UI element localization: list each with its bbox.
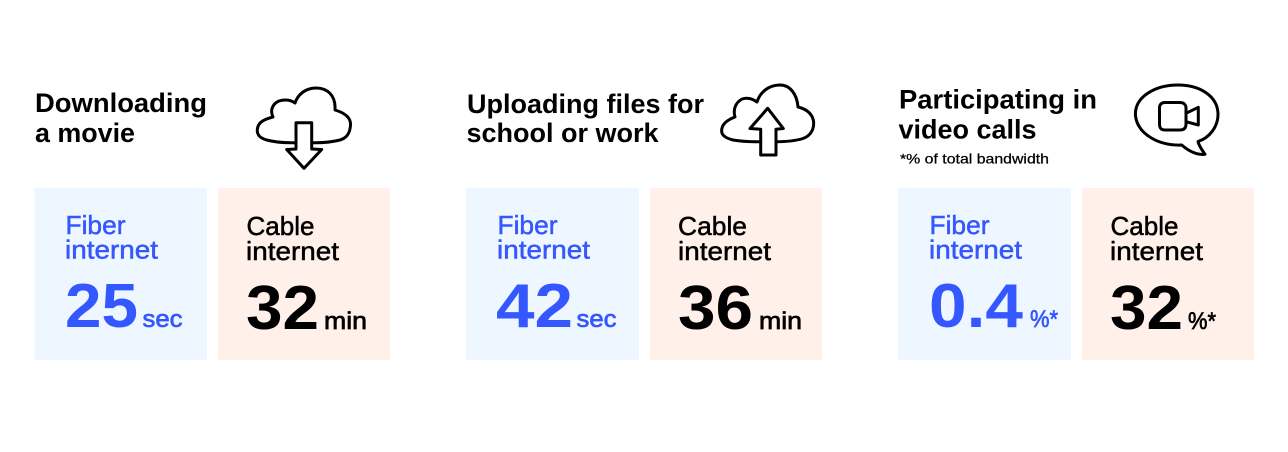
heading: participating in video calls: Participating in [899, 84, 1097, 114]
section: downloading a movie [34, 88, 390, 360]
panel: fiber upload: internet [497, 234, 591, 264]
panel: cable upload: 36 [678, 274, 753, 343]
heading: downloading a movie: a movie [35, 118, 135, 148]
panel: cable video calls: Cable [1110, 211, 1178, 241]
panel: cable video calls: internet [1110, 236, 1204, 266]
heading: participating in video calls: video calls [898, 114, 1036, 144]
panel: cable upload: internet [678, 236, 772, 266]
panel: cable video calls [1082, 188, 1254, 360]
panel: fiber download: 25 [65, 272, 138, 341]
panel: fiber download [34, 188, 207, 360]
panel: fiber video calls: internet [929, 234, 1023, 264]
icon: speech bubble with video camera [1135, 85, 1218, 154]
panel: fiber upload: 42 [496, 272, 573, 341]
panel: cable video calls: %* [1188, 308, 1216, 335]
panel: cable video calls: 32 [1110, 274, 1183, 343]
panel: cable upload: Cable [678, 211, 747, 241]
panel: fiber video calls: Fiber [930, 210, 990, 240]
panel: cable upload [650, 188, 822, 360]
panel: fiber download: Fiber [66, 210, 126, 240]
panel: fiber upload: sec [576, 306, 616, 333]
panel: fiber video calls [898, 188, 1071, 360]
heading: downloading a movie: Downloading [35, 88, 207, 118]
heading: uploading files for school or work: Uploading files for [467, 89, 704, 119]
panel: cable download: internet [246, 236, 340, 266]
panel: fiber upload [466, 188, 639, 360]
section: video calls [898, 84, 1254, 360]
panel: fiber download: sec [142, 306, 182, 333]
footnote: percent of total bandwidth: *% of total bandwidth [900, 150, 1049, 166]
panel: fiber download: internet [65, 234, 159, 264]
panel: cable download: Cable [246, 211, 314, 241]
section: uploading files [466, 85, 822, 360]
heading: downloading a movie [35, 88, 207, 148]
panel: cable download: 32 [246, 274, 319, 343]
panel: cable download: min [324, 308, 367, 335]
panel: cable upload: min [759, 308, 802, 335]
icon: cloud with upload arrow [722, 85, 814, 155]
heading: participating in video calls [898, 84, 1097, 144]
panel: fiber video calls: 0.4 [929, 272, 1024, 341]
panel: fiber video calls: %* [1030, 306, 1058, 333]
heading: uploading files for school or work: school or work [466, 118, 659, 148]
icon: cloud with download arrow [257, 88, 351, 168]
heading: uploading files for school or work [466, 89, 704, 148]
panel: cable download [218, 188, 390, 360]
panel: fiber upload: Fiber [498, 210, 558, 240]
